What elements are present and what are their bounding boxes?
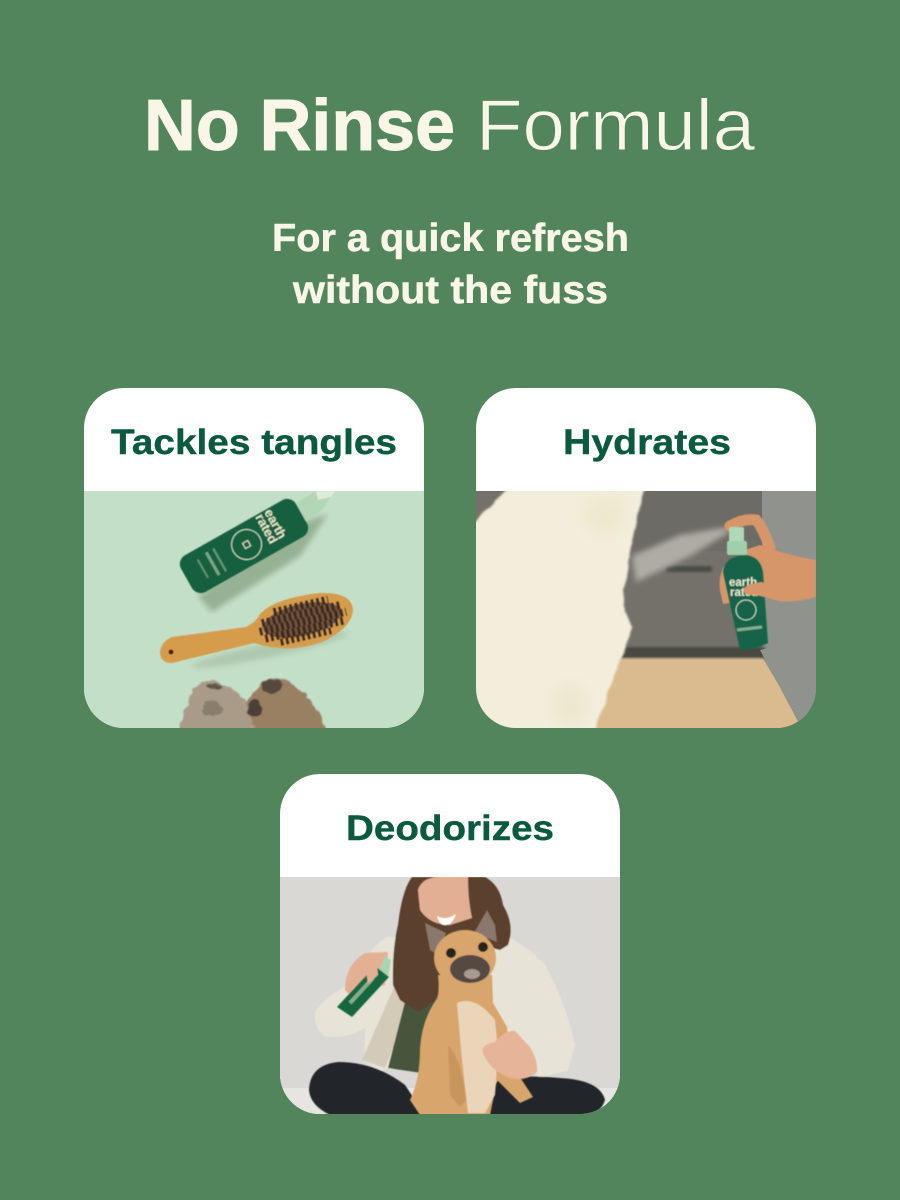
white dog fur (470, 486, 645, 735)
photo: bottle, brush and dog fur (84, 490, 424, 732)
icon: spray bottle: earth (261, 506, 290, 541)
panel: tackles tangles (84, 388, 424, 732)
title: Formula (476, 86, 756, 166)
woman (309, 877, 605, 1115)
dog fur (180, 677, 327, 732)
heading: hydrates: Hydrates (563, 423, 731, 462)
icon: spray bottle: rated (252, 511, 281, 546)
subtitle: without the fuss (292, 269, 608, 312)
title (144, 86, 756, 166)
icon: spray bottle in hand (337, 952, 391, 1017)
photo: spraying white dog (470, 486, 816, 735)
hand (720, 520, 816, 604)
icon: spray bottle: rated (730, 587, 758, 599)
icon: spray bottle (176, 490, 336, 597)
photo: woman holding dog (280, 877, 620, 1115)
title: No Rinse (144, 86, 455, 166)
subtitle (272, 217, 629, 312)
heading: tackles tangles: Tackles tangles (111, 423, 397, 462)
icon: wooden brush (160, 593, 353, 663)
hand on dog (482, 1031, 537, 1079)
heading: deodorizes: Deodorizes (346, 809, 554, 848)
dog (410, 910, 533, 1115)
panel: deodorizes (280, 774, 620, 1115)
icon: spray bottle (723, 527, 776, 650)
icon: spray bottle: earth (729, 577, 757, 589)
mist (632, 527, 728, 582)
panel: hydrates (470, 388, 816, 735)
legs (309, 1062, 425, 1115)
subtitle: For a quick refresh (272, 217, 629, 260)
